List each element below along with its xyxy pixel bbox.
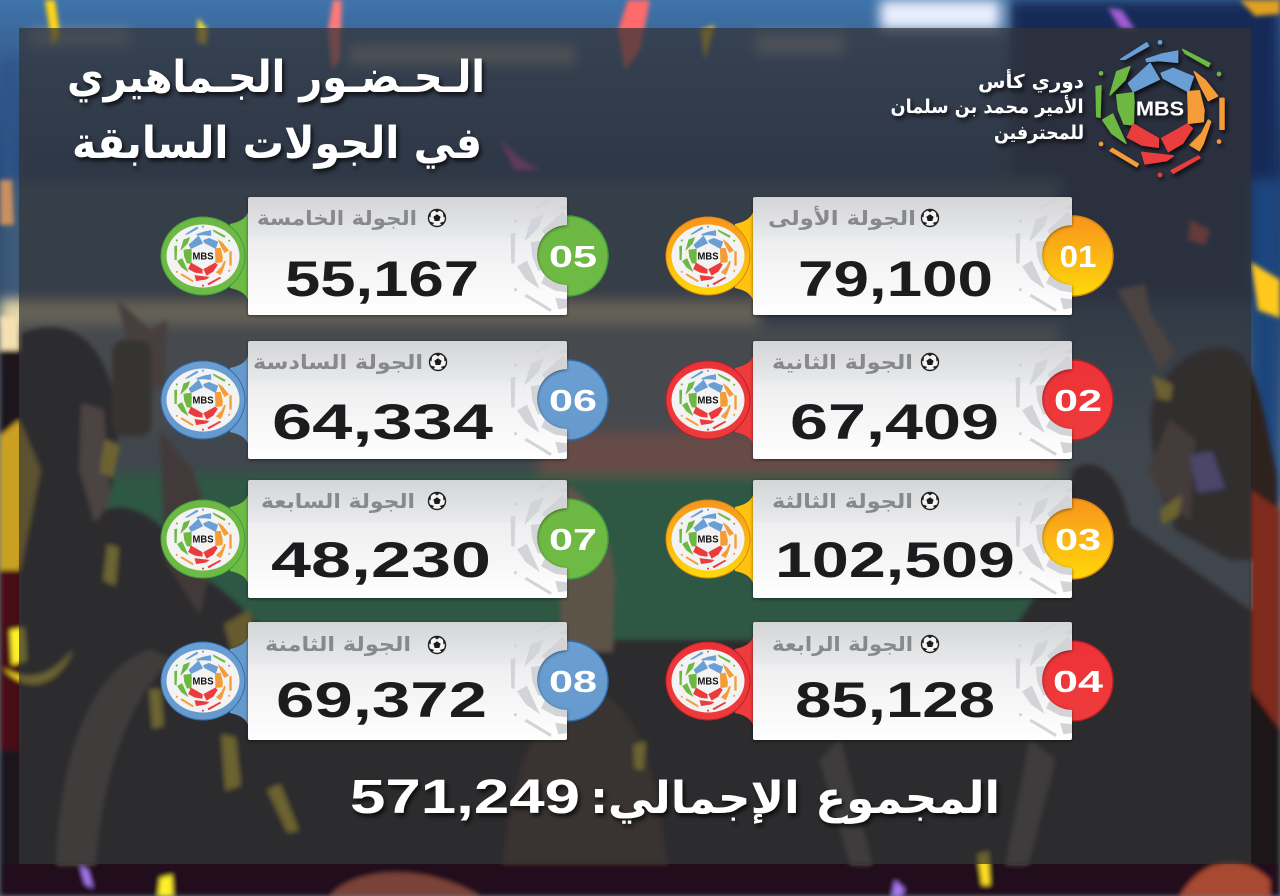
card: round 2: [666, 340, 1114, 462]
number badge 08: 08: [549, 664, 597, 699]
number badge 01: 01: [1060, 239, 1096, 274]
number badge 05: 05: [549, 239, 597, 274]
number badge 08: [528, 641, 608, 721]
attendance value: 102,509: [775, 532, 1015, 588]
number badge 02: [1033, 360, 1113, 440]
title: [67, 52, 485, 169]
logo medallion: MBS: [698, 676, 719, 688]
total value: 571,249: [350, 771, 580, 824]
confetti: [618, 0, 650, 70]
logo medallion: MBS: [698, 252, 719, 262]
round label: الجولة السابعة: [261, 489, 415, 513]
title line 1: الـحـضـور الجـماهيري: [67, 52, 485, 103]
round label: الجولة الثامنة: [265, 632, 411, 656]
ball icon: [428, 210, 446, 226]
ball icon: [428, 636, 446, 654]
number badge 03: 03: [1055, 522, 1101, 557]
number badge 03: [1033, 499, 1113, 579]
logo medallion: MBS: [192, 252, 214, 262]
number badge 04: [1033, 641, 1113, 721]
card body: [750, 622, 1074, 742]
round label: الجولة الأولى: [768, 205, 916, 230]
logo medallion: [666, 630, 755, 732]
number badge 07: [528, 499, 608, 579]
ball icon: [922, 354, 938, 370]
card body: [750, 197, 1074, 318]
MBS league logo: [1096, 41, 1224, 177]
logo medallion: MBS: [192, 534, 214, 546]
crowd silhouettes: [0, 640, 1280, 896]
number badge 06: 06: [549, 383, 597, 418]
attendance value: 48,230: [271, 532, 491, 588]
total label: المجموع الإجمالي:: [590, 773, 1000, 824]
ball icon: [922, 636, 938, 652]
card body: [246, 197, 569, 318]
round label: الجولة السادسة: [253, 350, 423, 374]
attendance value: 67,409: [790, 394, 999, 450]
logo medallion: [161, 630, 250, 732]
card: round 4: [666, 622, 1114, 742]
number badge 06: [528, 360, 608, 440]
logo medallion: [161, 205, 250, 307]
logo medallion: [161, 349, 250, 451]
title line 2: في الجولات السابقة: [72, 118, 482, 169]
attendance value: 69,372: [276, 672, 487, 728]
attendance value: 55,167: [285, 251, 479, 307]
logo medallion: MBS: [192, 396, 214, 406]
logo medallion: MBS: [698, 534, 719, 546]
number badge 04: 04: [1053, 664, 1104, 699]
MBS logo wordmark: MBS: [1136, 98, 1184, 120]
card body: [246, 622, 569, 742]
logo medallion: MBS: [698, 396, 719, 406]
card: round 5: [160, 197, 609, 318]
league name text: [890, 69, 1084, 144]
attendance value: 79,100: [798, 251, 993, 307]
card body: [246, 340, 569, 462]
league name line 2: الأمير محمد بن سلمان: [890, 95, 1084, 118]
number badge 07: 07: [549, 522, 597, 557]
card: round 3: [666, 480, 1114, 600]
attendance value: 64,334: [272, 394, 493, 450]
card: round 7: [160, 480, 609, 600]
logo medallion: [666, 205, 755, 307]
number badge 02: 02: [1054, 383, 1102, 418]
logo medallion: [666, 488, 755, 590]
card: round 6: [160, 340, 609, 462]
attendance value: 85,128: [795, 672, 995, 728]
ball icon: [922, 492, 938, 510]
round label: الجولة الرابعة: [772, 632, 913, 656]
card: round 8: [160, 622, 609, 742]
round label: الجولة الثالثة: [772, 489, 913, 513]
logo medallion: [666, 349, 755, 451]
number badge 01: [1033, 216, 1113, 296]
card body: [750, 340, 1074, 462]
ball icon: [922, 210, 938, 226]
card body: [246, 480, 569, 600]
round label: الجولة الخامسة: [257, 206, 417, 230]
logo medallion: [161, 488, 250, 590]
ball icon: [428, 492, 446, 510]
number badge 05: [528, 216, 608, 296]
league name line 1: دوري كأس: [978, 69, 1084, 94]
card body: [750, 480, 1074, 600]
grand total: [350, 771, 1000, 824]
card: round 1: [666, 197, 1114, 318]
logo medallion: MBS: [192, 676, 214, 688]
round label: الجولة الثانية: [772, 350, 913, 374]
ball icon: [430, 354, 446, 370]
league name line 3: للمحترفين: [994, 122, 1084, 144]
